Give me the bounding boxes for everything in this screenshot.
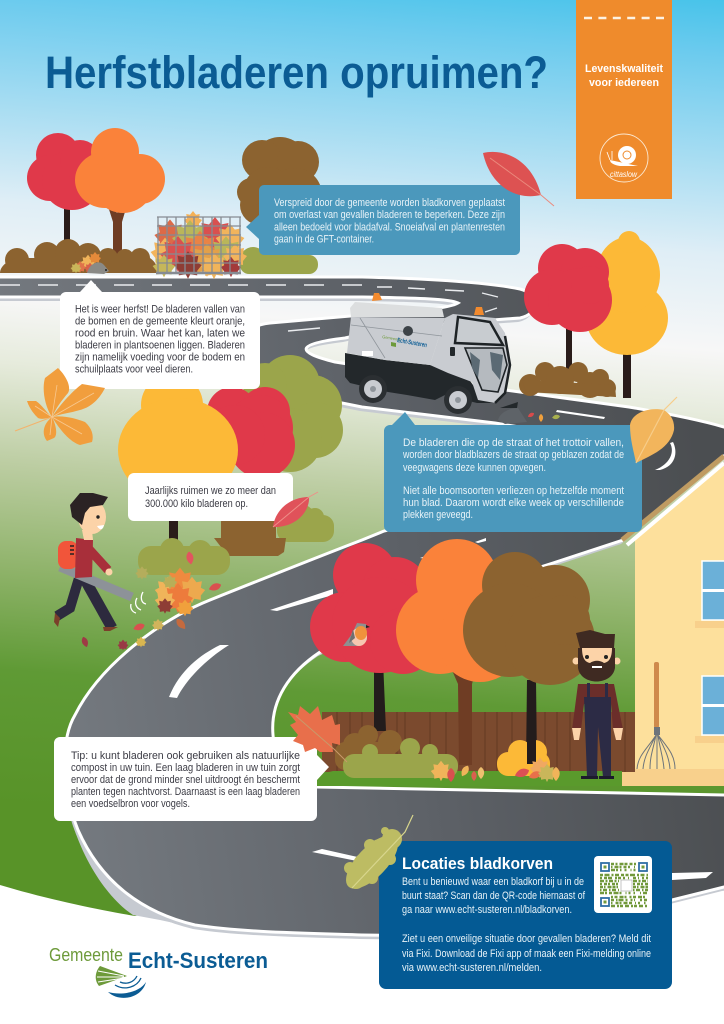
shrubs middle — [138, 504, 334, 575]
orange cittaslow banner: voor iedereen — [589, 77, 659, 89]
garden fence — [322, 712, 635, 772]
QR code — [594, 856, 652, 913]
chestnut leaf — [15, 368, 105, 445]
hedgehog with leaves — [71, 252, 109, 274]
street sweeper truck — [345, 293, 560, 424]
info box: autumn intro: zijn namelijk voeding voor de bodem en — [75, 352, 245, 364]
trees top left — [27, 128, 165, 255]
info box: sweeping: plekken geveegd. — [403, 509, 473, 521]
winding road — [0, 277, 724, 939]
red falling leaf top — [483, 152, 554, 206]
info box: basket: Verspreid door de gemeente worden bladkorven geplaatst — [274, 197, 505, 209]
rake — [637, 662, 675, 769]
brown hedge top left — [0, 239, 158, 273]
yellow falling leaf — [630, 397, 677, 463]
info box: autumn intro: de bomen en de gemeente kleurt oranje, — [75, 316, 245, 328]
panel: locaties bladkorven: ga naar www.echt-susteren.nl/bladkorven. — [402, 904, 572, 916]
robin — [343, 623, 370, 646]
street sweeper truck: Gemeente — [382, 334, 402, 342]
street sweeper truck: Echt-Susteren — [397, 337, 427, 349]
orange cittaslow banner: Levenskwaliteit — [585, 63, 663, 75]
panel: locaties bladkorven: via www.echt-susteren.nl/melden. — [402, 962, 542, 974]
maple leaf — [288, 706, 347, 762]
red leaf on box — [273, 492, 318, 527]
info box: autumn intro: schuilplaats voor veel dieren. — [75, 364, 193, 376]
info box: autumn intro: bladeren in plantsoenen liggen. Bladeren — [75, 340, 245, 352]
blown leaf pile — [80, 551, 222, 650]
gardener — [572, 630, 623, 778]
icon: cittaslow snail: cittaslow — [610, 170, 638, 179]
logo Gemeente Echt-Susteren — [49, 945, 268, 998]
icon: cittaslow snail — [600, 134, 648, 182]
green tree middle — [243, 355, 343, 472]
icon: leaf and water logo — [96, 966, 146, 998]
orange cittaslow banner — [576, 0, 672, 199]
info box: tip: ervoor dat de grond minder snel uitdroogt én beschermt — [71, 774, 300, 786]
trees right — [524, 231, 668, 398]
brown tree behind info box — [237, 137, 322, 225]
info box: sweeping: veegwagens deze kunnen opvegen. — [403, 462, 546, 474]
title: Herfstbladeren opruimen? — [45, 47, 548, 98]
info box: tip: een voedselbron voor vogels. — [71, 798, 190, 810]
red tree middle — [205, 387, 295, 478]
panel: locaties bladkorven: Ziet u een onveilige situatie door gevallen bladeren? Meld dit — [402, 933, 651, 945]
info box: sweeping: Niet alle boomsoorten verliezen op hetzelfde moment — [403, 485, 624, 497]
logo Gemeente Echt-Susteren: Echt-Susteren — [128, 948, 268, 973]
info box: sweeping: De bladeren die op de straat of het trottoir vallen, — [403, 437, 624, 449]
panel: locaties bladkorven: via Fixi. Download de Fixi app of maak een Fixi-melding online — [402, 948, 651, 960]
info box: sweeping: worden door bladblazers de straat op geblazen zodat de — [402, 449, 624, 461]
info box: basket — [246, 185, 520, 255]
garden shrubs and leaf piles — [335, 725, 560, 782]
info box: 300.000 kilo — [128, 473, 293, 521]
info box: tip: planten tegen nachtvorst. Daarnaast is een laag bladeren — [71, 786, 300, 798]
brown shrub right — [519, 362, 616, 398]
panel: locaties bladkorven — [379, 841, 672, 989]
green shrub by basket — [240, 247, 318, 274]
panel: locaties bladkorven: Locaties bladkorven — [402, 854, 553, 873]
logo Gemeente Echt-Susteren: Gemeente — [49, 945, 123, 965]
tree trunk middle — [169, 515, 178, 543]
info box: 300.000 kilo: Jaarlijks ruimen we zo meer dan — [145, 485, 276, 497]
info box: basket: gaan in de GFT-container. — [274, 234, 374, 246]
info box: autumn intro: Het is weer herfst! De bladeren vallen van — [75, 304, 245, 316]
grass strip — [317, 771, 622, 786]
info box: autumn intro: rood en bruin. Waar het kan, laten we — [75, 328, 245, 340]
info box: basket: om overlast van gevallen bladeren te beperken. Deze zijn — [274, 209, 505, 221]
info box: basket: alleen bedoeld voor bladafval. Snoeiafval en plantenresten — [274, 222, 505, 234]
garden trees — [310, 539, 595, 765]
yellow tree middle — [118, 374, 238, 502]
info box: tip: Tip: u kunt bladeren ook gebruiken als natuurlijke — [71, 750, 300, 762]
panel: locaties bladkorven: buurt staat? Scan dan de QR-code hiernaast of — [402, 890, 586, 902]
panel: locaties bladkorven: Bent u benieuwd waar een bladkorf bij u in de — [402, 876, 584, 888]
info box: sweeping: hun blad. Daarom wordt elke week op verschillende — [403, 497, 624, 509]
white bottom area — [0, 880, 724, 1024]
road kerb shadow — [72, 822, 197, 928]
oak leaf — [338, 815, 413, 897]
info box: tip — [54, 737, 329, 821]
man with leaf blower — [54, 493, 146, 631]
info box: autumn intro — [60, 280, 260, 389]
leaf basket — [151, 211, 247, 279]
house — [619, 456, 724, 786]
info box: 300.000 kilo: 300.000 kilo bladeren op. — [145, 498, 248, 510]
info box: sweeping — [384, 412, 642, 532]
info box: tip: compost in uw tuin. Een laag bladeren in uw tuin zorgt — [71, 762, 300, 774]
